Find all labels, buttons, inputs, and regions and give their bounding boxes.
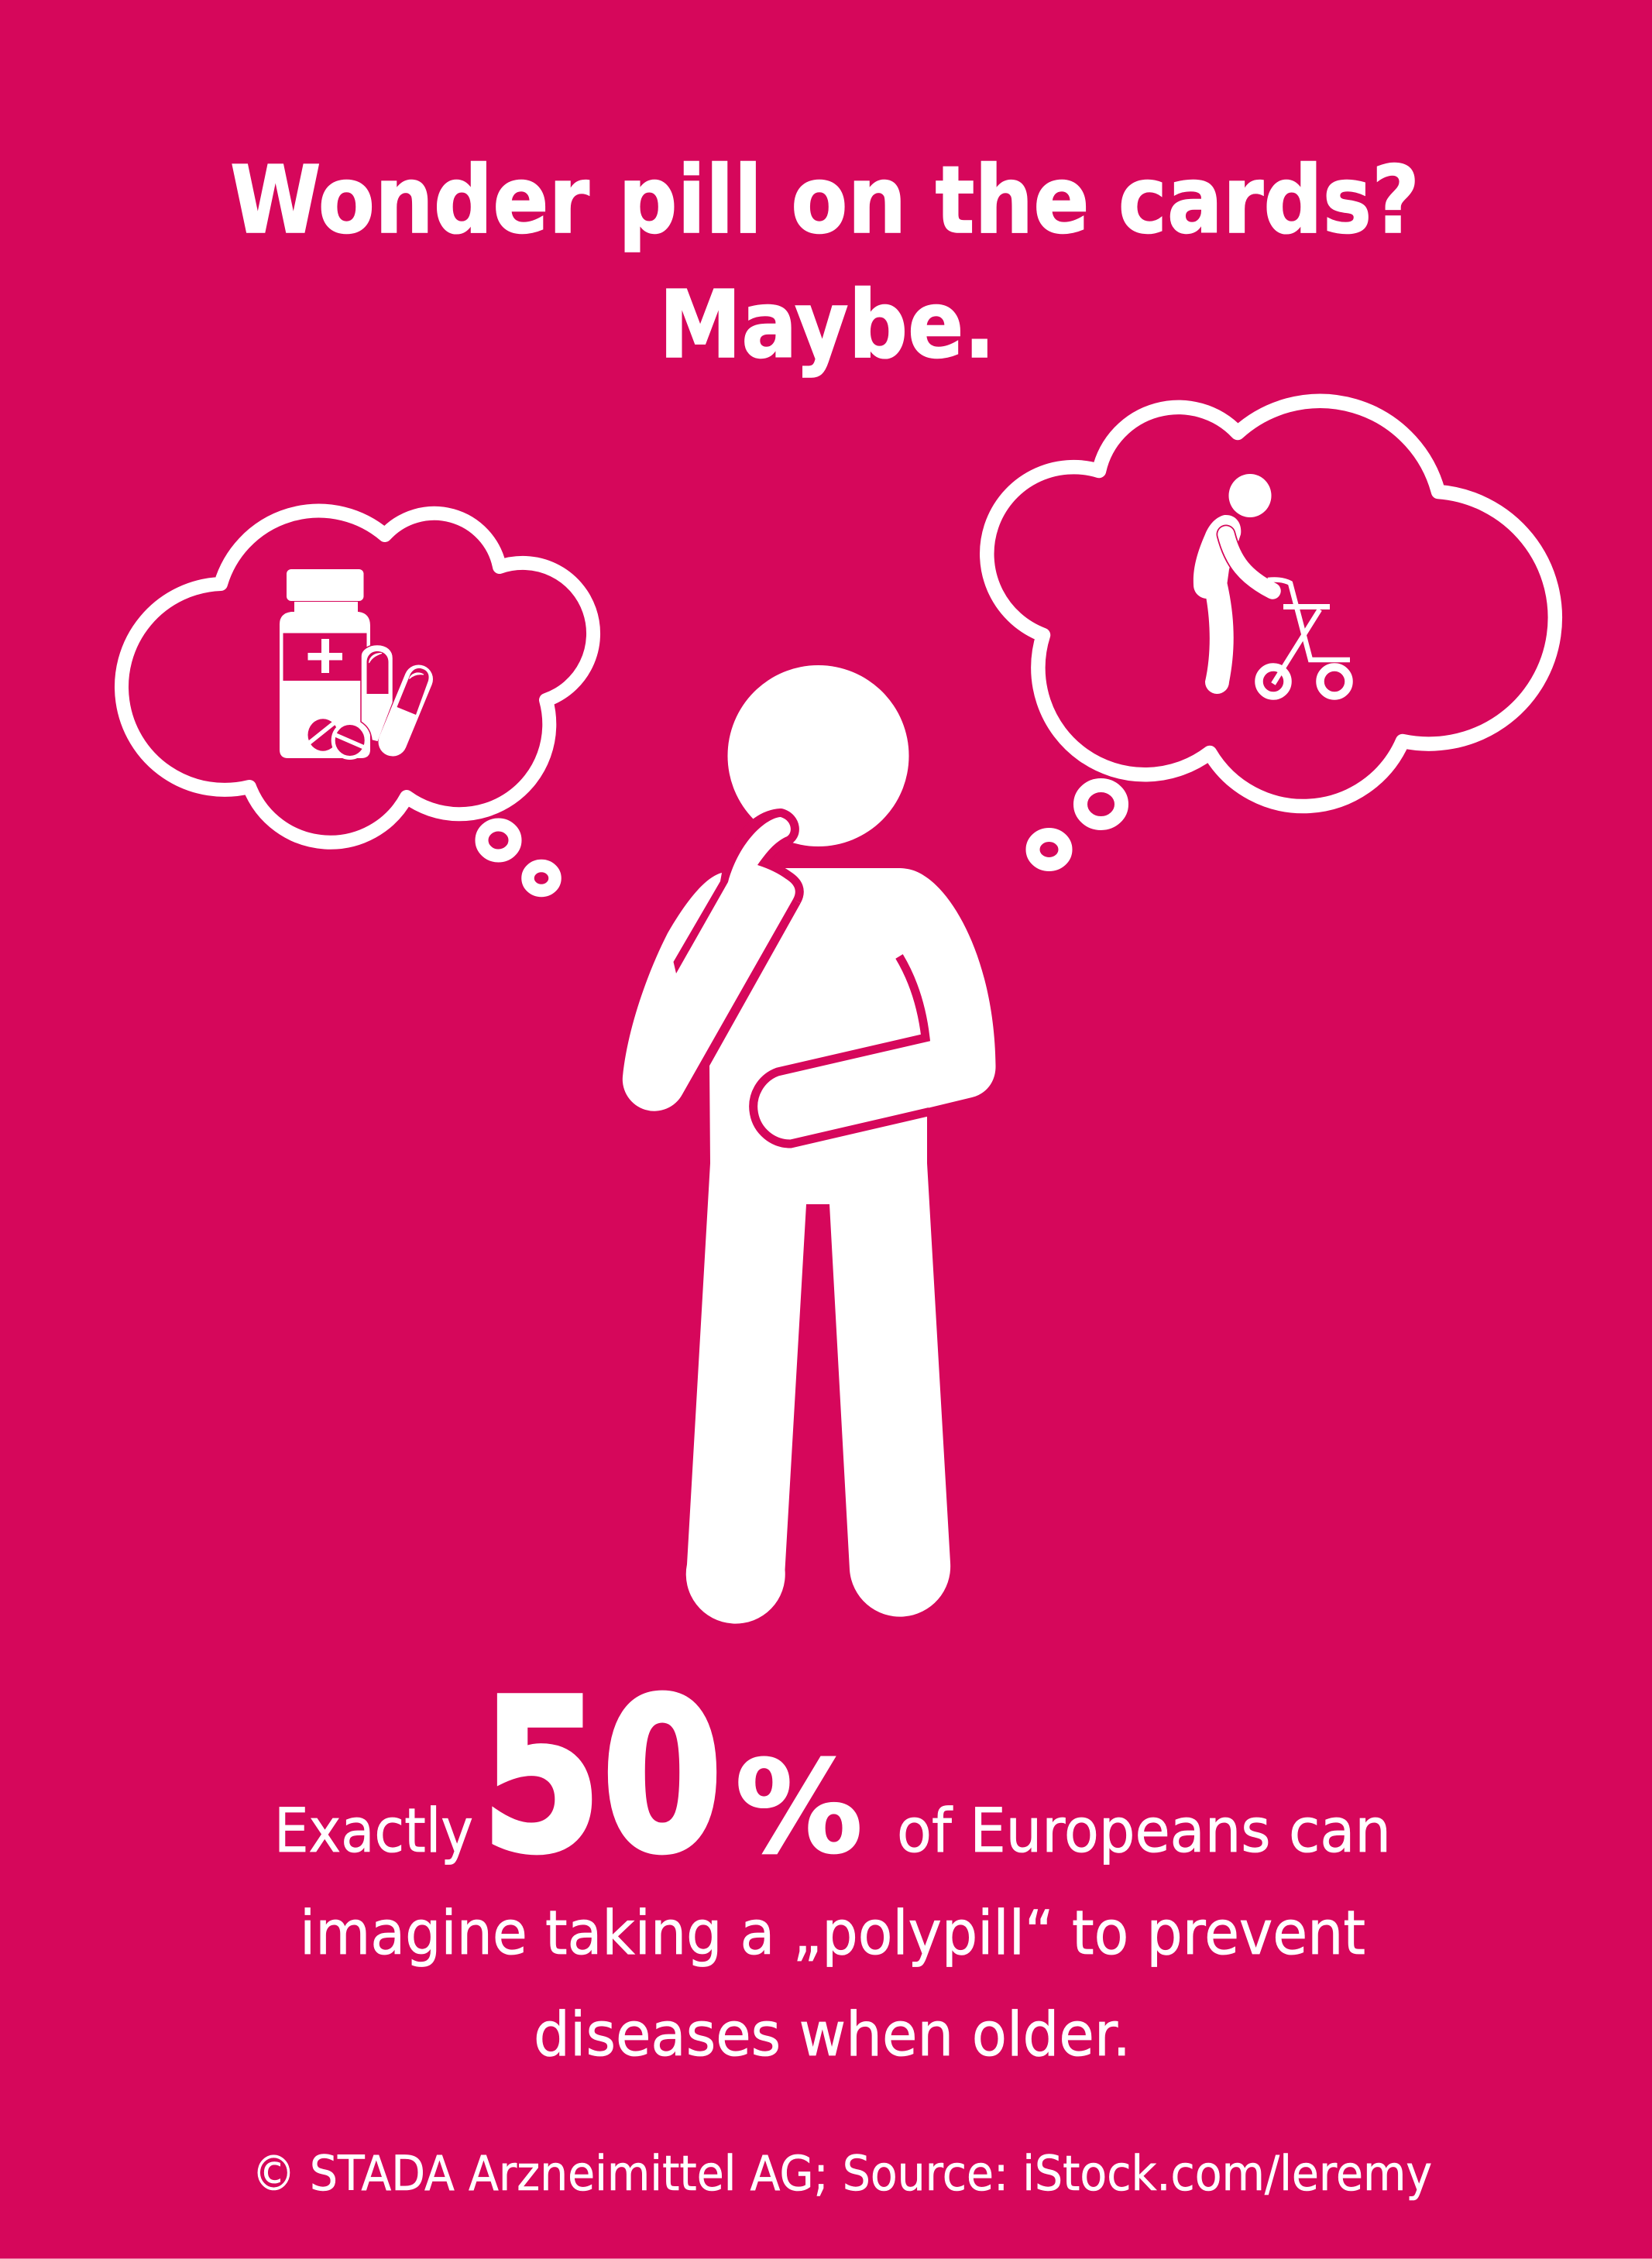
folded forearm outline <box>754 956 929 1144</box>
icon: capsule tilted <box>393 668 429 742</box>
statistic text: diseases when older. <box>534 2000 1131 2070</box>
statistic text: 50 <box>481 1655 723 1900</box>
head <box>728 665 909 846</box>
icon: walker <box>1259 579 1350 695</box>
title: Maybe. <box>659 272 995 379</box>
thought bubble: old age <box>987 401 1555 864</box>
statistic text: Exactly <box>274 1797 473 1866</box>
thought bubble: medication <box>122 511 593 891</box>
statistic text: imagine taking a „polypill“ to prevent <box>300 1899 1365 1969</box>
figure: thinking person <box>623 665 996 1624</box>
statistic text: of Europeans can <box>897 1797 1391 1866</box>
icon: pill bottle <box>280 569 429 758</box>
icon: capsule upright <box>361 644 393 742</box>
title: Wonder pill on the cards? <box>230 147 1420 255</box>
title <box>230 147 1420 379</box>
source credit: © STADA Arzneimittel AG; Source: iStock.com/leremy <box>252 2145 1432 2202</box>
torso and legs <box>686 868 996 1624</box>
icon: elderly person <box>1193 474 1350 695</box>
statistic text: % <box>735 1733 863 1882</box>
icon: round tablets <box>307 719 366 757</box>
raised arm <box>623 817 795 1111</box>
statistic text <box>274 1655 1391 2070</box>
